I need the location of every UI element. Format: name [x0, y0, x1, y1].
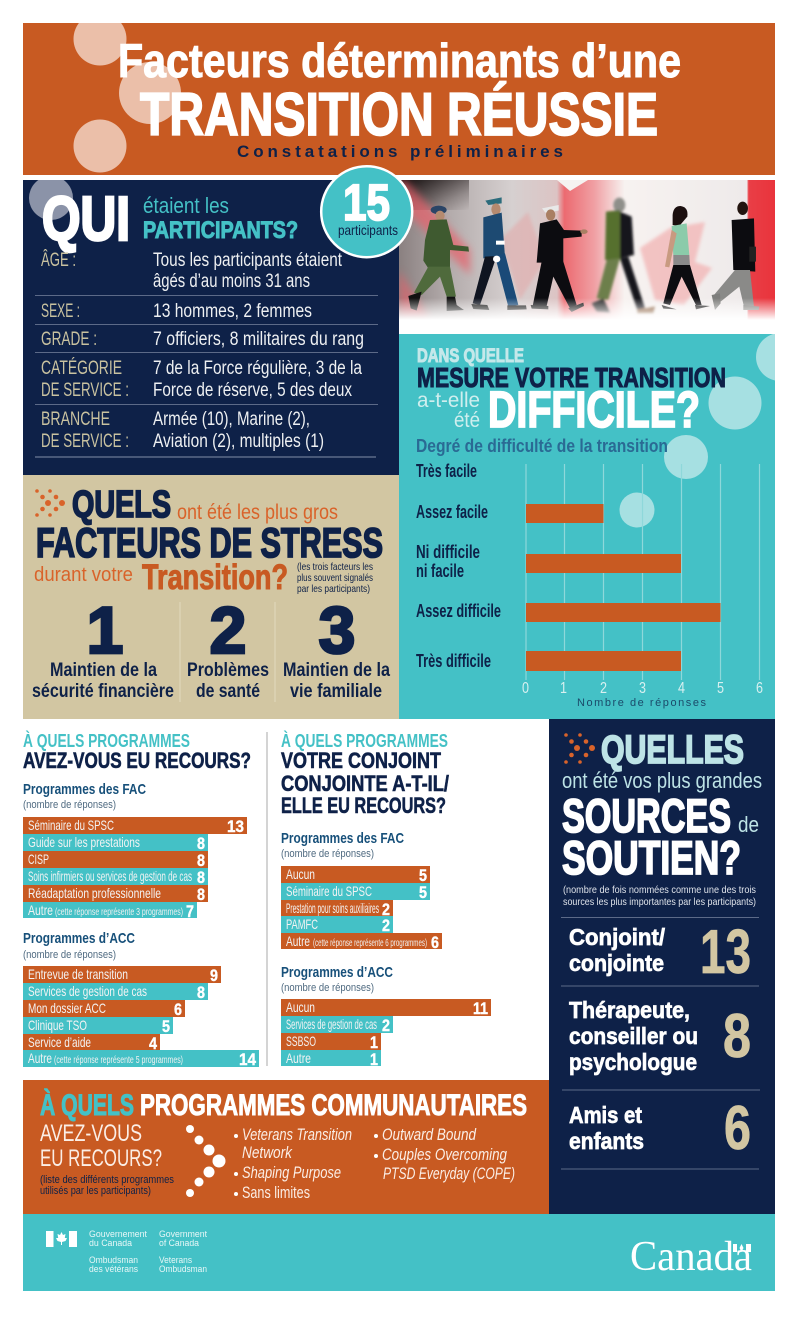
heading: AVEZ-VOUS EU RECOURS? — [23, 748, 251, 773]
heading: À QUELS PROGRAMMES — [23, 730, 190, 751]
table: grade: 7 officiers, 8 militaires du rang — [153, 329, 364, 350]
heading — [23, 730, 251, 773]
source: conjoint — [569, 918, 751, 987]
factor 1 — [32, 593, 174, 702]
icon: orange dotted chevrons — [35, 489, 65, 517]
bars: ACC programs: Service d’aide — [28, 1034, 91, 1050]
bar chart: difficulty: 2 — [600, 680, 607, 697]
table: sexe — [41, 301, 312, 322]
person: businessman on the phone — [712, 202, 759, 310]
bar chart: difficulty: 5 — [717, 680, 724, 697]
panel: title banner — [23, 12, 775, 175]
bars: spouse ACC programs: 11 — [473, 999, 488, 1018]
factor 3: Maintien de la — [283, 660, 390, 681]
bar chart: difficulty: ni facile — [416, 561, 464, 581]
subheading: ACC — [23, 930, 135, 961]
heading: soutien: SOUTIEN? — [562, 831, 741, 884]
note: sources les plus importantes par les participants) — [563, 896, 756, 908]
bars: FAC programs: Soins infirmiers ou services de gestion de cas — [28, 868, 192, 884]
bars: ACC programs: 9 — [210, 966, 218, 985]
heading: dans quelle: DANS QUELLE — [417, 346, 524, 367]
panel: facteurs de stress — [23, 475, 399, 719]
bars: ACC programs: (cette réponse représente 5 programmes) — [54, 1055, 183, 1066]
source: amis: Amis et — [569, 1102, 642, 1128]
bars: ACC programs: 6 — [174, 1000, 182, 1019]
source: thérapeute: 8 — [723, 1002, 751, 1071]
table: branche de service: DE SERVICE : — [41, 431, 129, 452]
person: navy officer — [531, 205, 588, 312]
list: column 1: Shaping Purpose — [242, 1163, 341, 1182]
list: column 1: Veterans Transition — [242, 1125, 352, 1144]
note: (liste des différents programmes — [40, 1174, 174, 1186]
source: conjoint: 13 — [700, 918, 751, 987]
text: government names — [89, 1229, 207, 1274]
heading: avez-vous eu recours — [40, 1120, 162, 1172]
bars: FAC programs: 7 — [186, 902, 194, 921]
bars: spouse FAC programs: Autre — [286, 933, 310, 949]
list: column 2 — [374, 1125, 515, 1183]
bars: ACC programs: Autre — [28, 1050, 52, 1066]
note: utilisés par les participants) — [40, 1185, 151, 1197]
heading: difficile: DIFFICILE? — [488, 381, 700, 438]
subheading: FAC: (nombre de réponses) — [281, 848, 374, 860]
table: categorie de service: 7 de la Force régulière, 3 de la — [153, 358, 362, 379]
list: column 1: Sans limites — [242, 1183, 310, 1202]
bars: FAC programs: 8 — [197, 834, 205, 853]
title line 2: TRANSITION RÉUSSIE — [140, 81, 658, 148]
factor 2: de santé — [196, 681, 260, 702]
bars: spouse FAC programs — [281, 866, 442, 952]
photo: six people walking in front of a Canadian flag — [399, 180, 775, 325]
bar chart: difficulty: Ni difficile — [416, 542, 480, 562]
bars: spouse ACC programs: 2 — [382, 1016, 390, 1035]
badge: 15 participants: participants — [338, 222, 398, 238]
bar chart: difficulty: 6 — [756, 680, 763, 697]
subheading: FAC: Programmes des FAC — [23, 781, 146, 798]
bars: ACC programs — [23, 966, 259, 1069]
bars: spouse FAC programs: Aucun — [286, 866, 315, 882]
bar chart: difficulty: Très facile — [416, 461, 477, 481]
source: thérapeute — [569, 997, 751, 1075]
bars: FAC programs: Autre — [28, 902, 53, 918]
list: column 1 — [234, 1125, 352, 1202]
bars: spouse ACC programs: Services de gestion de cas — [286, 1016, 377, 1032]
source: amis — [569, 1094, 751, 1163]
heading: transition: Transition? — [142, 558, 288, 597]
bars: ACC programs: 4 — [149, 1034, 157, 1053]
bars: ACC programs: Entrevue de transition — [28, 966, 128, 982]
table: categorie de service: CATÉGORIE — [41, 358, 122, 379]
badge: 15 participants: 15 — [343, 174, 390, 231]
factor 2: Problèmes — [187, 660, 269, 681]
bars: FAC programs: CISP — [28, 851, 49, 867]
list: column 2: PTSD Everyday (COPE) — [383, 1164, 515, 1183]
heading: ont été: ont été vos plus grandes — [562, 768, 762, 793]
heading: de: de — [738, 812, 759, 837]
bars: spouse ACC programs: 1 — [370, 1050, 378, 1069]
heading: CONJOINTE A-T-IL/ — [281, 771, 449, 796]
heading: QUI: QUI — [42, 185, 130, 254]
heading: quelles: QUELLES — [601, 728, 744, 772]
bars: ACC programs: 5 — [162, 1017, 170, 1036]
bar chart: difficulty: Nombre de réponses — [577, 697, 706, 709]
bar chart: difficulty: 0 — [522, 680, 529, 697]
factor 3: 3 — [319, 593, 355, 667]
text: government names: Ombudsman — [159, 1264, 207, 1274]
note — [297, 561, 373, 595]
subheading: ACC: (nombre de réponses) — [23, 949, 116, 961]
heading: étaient les: étaient les — [143, 193, 229, 218]
factor 1: sécurité financière — [32, 681, 174, 702]
table: branche de service: Armée (10), Marine (2), — [153, 409, 310, 430]
factor 3: vie familiale — [290, 681, 382, 702]
bar chart: difficulty: Assez facile — [416, 502, 488, 522]
chart title: Degré de difficulté de la transition — [416, 436, 668, 456]
panel: difficulté de la transition — [399, 333, 800, 719]
subheading: ACC: Programmes d’ACC — [23, 930, 135, 947]
source: amis: 6 — [724, 1094, 751, 1163]
bar chart: difficulty: 1 — [560, 680, 567, 697]
bars: spouse FAC programs: 2 — [382, 900, 390, 919]
title line 1: Facteurs déterminants d’une — [118, 34, 681, 87]
heading — [281, 730, 449, 818]
bars: FAC programs: 8 — [197, 868, 205, 887]
text: government names: du Canada — [89, 1238, 132, 1248]
panel: programmes utilisés par le conjoint — [281, 730, 491, 1069]
note: (nombre de fois nommées comme une des trois — [563, 884, 756, 896]
subheading: ACC — [281, 964, 393, 994]
heading: facteurs de stress: FACTEURS DE STRESS — [36, 519, 383, 566]
bars: spouse ACC programs: SSBSO — [286, 1033, 316, 1049]
bars: spouse FAC programs: 5 — [419, 866, 427, 885]
bars: spouse ACC programs — [281, 999, 491, 1069]
note: (les trois facteurs les — [297, 561, 373, 573]
bars: FAC programs: Réadaptation professionnelle — [28, 885, 161, 901]
subheading: ACC: (nombre de réponses) — [281, 982, 374, 994]
heading: ont été: ont été les plus gros — [177, 501, 338, 524]
table: age — [41, 249, 343, 292]
table: branche de service: BRANCHE — [41, 409, 110, 430]
panel: qui étaient les participants — [23, 176, 399, 475]
bars: spouse ACC programs: 1 — [370, 1033, 378, 1052]
footer: government identifiers — [23, 1214, 775, 1291]
text: government names: of Canada — [159, 1238, 199, 1248]
note — [563, 884, 756, 908]
table: categorie de service: DE SERVICE : — [41, 380, 129, 401]
icon: white dotted chevron — [186, 1125, 226, 1197]
table: branche de service: Aviation (2), multiples (1) — [153, 431, 324, 452]
source: amis: enfants — [569, 1128, 644, 1154]
note: par les participants) — [297, 583, 370, 595]
bars: spouse FAC programs: (cette réponse représente 6 programmes) — [313, 938, 427, 949]
list: column 2: Outward Bound — [382, 1125, 476, 1144]
text: government names: Government — [159, 1229, 207, 1239]
bars: FAC programs: Séminaire du SPSC — [28, 817, 114, 833]
table: categorie de service: Force de réserve, 5 des deux — [153, 380, 352, 401]
list: column 2: Couples Overcoming — [382, 1145, 507, 1164]
table: age: âgés d’au moins 31 ans — [153, 271, 310, 292]
factor 2: 2 — [210, 593, 246, 667]
heading: durant votre: durant votre — [34, 564, 133, 586]
heading: programmes communautaires: PROGRAMMES COMMUNAUTAIRES — [140, 1089, 527, 1122]
factor 3 — [283, 593, 390, 702]
heading: avez-vous eu recours: AVEZ-VOUS — [40, 1120, 142, 1147]
heading: quels: QUELS — [72, 484, 171, 526]
bars: spouse FAC programs: Prestation pour soins auxiliaires — [286, 900, 379, 916]
source: conjoint: conjointe — [569, 950, 664, 976]
panel: sources de soutien — [549, 719, 775, 1214]
heading: VOTRE CONJOINT — [281, 748, 441, 773]
bars: spouse FAC programs: PAMFC — [286, 916, 318, 932]
table: grade — [41, 329, 364, 350]
bar chart: difficulty — [416, 461, 763, 709]
person: soldier in camouflage — [408, 206, 469, 311]
icon: orange dotted chevrons — [564, 733, 595, 764]
source: conjoint: Conjoint/ — [569, 924, 666, 950]
bars: FAC programs: 8 — [197, 885, 205, 904]
text: government names: des vétérans — [89, 1264, 138, 1274]
bars: ACC programs: 8 — [197, 983, 205, 1002]
heading: participants: PARTICIPANTS? — [143, 217, 298, 244]
table: branche de service — [41, 409, 324, 452]
bars: spouse FAC programs: Séminaire du SPSC — [286, 883, 372, 899]
note: plus souvent signalés — [297, 572, 373, 584]
person: woman in mint blouse — [662, 206, 710, 309]
bars: FAC programs: (cette réponse représente 3 programmes) — [55, 907, 183, 918]
source: thérapeute: conseiller ou — [569, 1023, 698, 1049]
text: government names: Gouvernement — [89, 1229, 147, 1239]
badge: 15 participants — [321, 166, 412, 257]
factor 1: 1 — [87, 593, 123, 667]
heading: été: été — [454, 409, 480, 432]
bar chart: difficulty: Assez difficile — [416, 601, 501, 621]
subheading: FAC — [281, 830, 404, 860]
panel: programmes communautaires — [23, 1080, 549, 1214]
subheading: ACC: Programmes d’ACC — [281, 964, 393, 981]
bars: FAC programs — [23, 817, 247, 921]
note — [40, 1174, 174, 1197]
bars: spouse ACC programs: Autre — [286, 1050, 311, 1066]
panel: programmes utilisés — [23, 730, 259, 1069]
heading: ELLE EU RECOURS? — [281, 793, 446, 818]
heading: à quels: À QUELS — [40, 1088, 134, 1122]
wordmark: Canada: Canada — [630, 1234, 752, 1280]
factor 1: Maintien de la — [50, 660, 157, 681]
bars: spouse FAC programs: 6 — [431, 933, 439, 952]
heading: avez-vous eu recours: EU RECOURS? — [40, 1145, 162, 1172]
table: age: Tous les participants étaient — [153, 250, 343, 271]
bar chart: difficulty: 3 — [639, 680, 646, 697]
factor 2 — [187, 593, 269, 702]
icon: Canadian flag symbol — [46, 1231, 77, 1247]
table: age: ÂGE : — [41, 249, 76, 271]
text: government names: Ombudsman — [89, 1255, 138, 1265]
bars: ACC programs: Clinique TSO — [28, 1017, 87, 1033]
subheading: FAC: (nombre de réponses) — [23, 799, 116, 811]
table: sexe: SEXE : — [41, 301, 80, 322]
bars: ACC programs: Mon dossier ACC — [28, 1000, 106, 1016]
list: column 1: Network — [242, 1143, 293, 1162]
table: sexe: 13 hommes, 2 femmes — [153, 301, 312, 322]
subheading: FAC — [23, 781, 146, 811]
bars: spouse ACC programs: Aucun — [286, 999, 315, 1015]
subtitle: Constatations préliminaires — [237, 142, 563, 161]
heading: À QUELS PROGRAMMES — [281, 730, 448, 751]
bars: FAC programs: 8 — [197, 851, 205, 870]
bars: ACC programs: Services de gestion de cas — [28, 983, 147, 999]
bars: FAC programs: Guide sur les prestations — [28, 834, 140, 850]
text: government names: Veterans — [159, 1255, 192, 1265]
person: air force officer — [471, 197, 527, 310]
source: thérapeute: psychologue — [569, 1049, 697, 1075]
bars: FAC programs: 13 — [227, 817, 244, 836]
person: blurred man in transition — [592, 198, 655, 313]
bars: ACC programs: 14 — [239, 1050, 256, 1069]
table: categorie de service — [41, 358, 362, 401]
subheading: FAC: Programmes des FAC — [281, 830, 404, 847]
heading: a-t-elle: a-t-elle — [417, 389, 480, 412]
heading: sources: SOURCES — [562, 789, 731, 842]
bars: spouse FAC programs: 5 — [419, 883, 427, 902]
source: thérapeute: Thérapeute, — [569, 997, 690, 1023]
bar chart: difficulty: 4 — [678, 680, 685, 697]
bars: spouse FAC programs: 2 — [382, 916, 390, 935]
bar chart: difficulty: Très difficile — [416, 651, 491, 671]
table: grade: GRADE : — [41, 329, 97, 350]
